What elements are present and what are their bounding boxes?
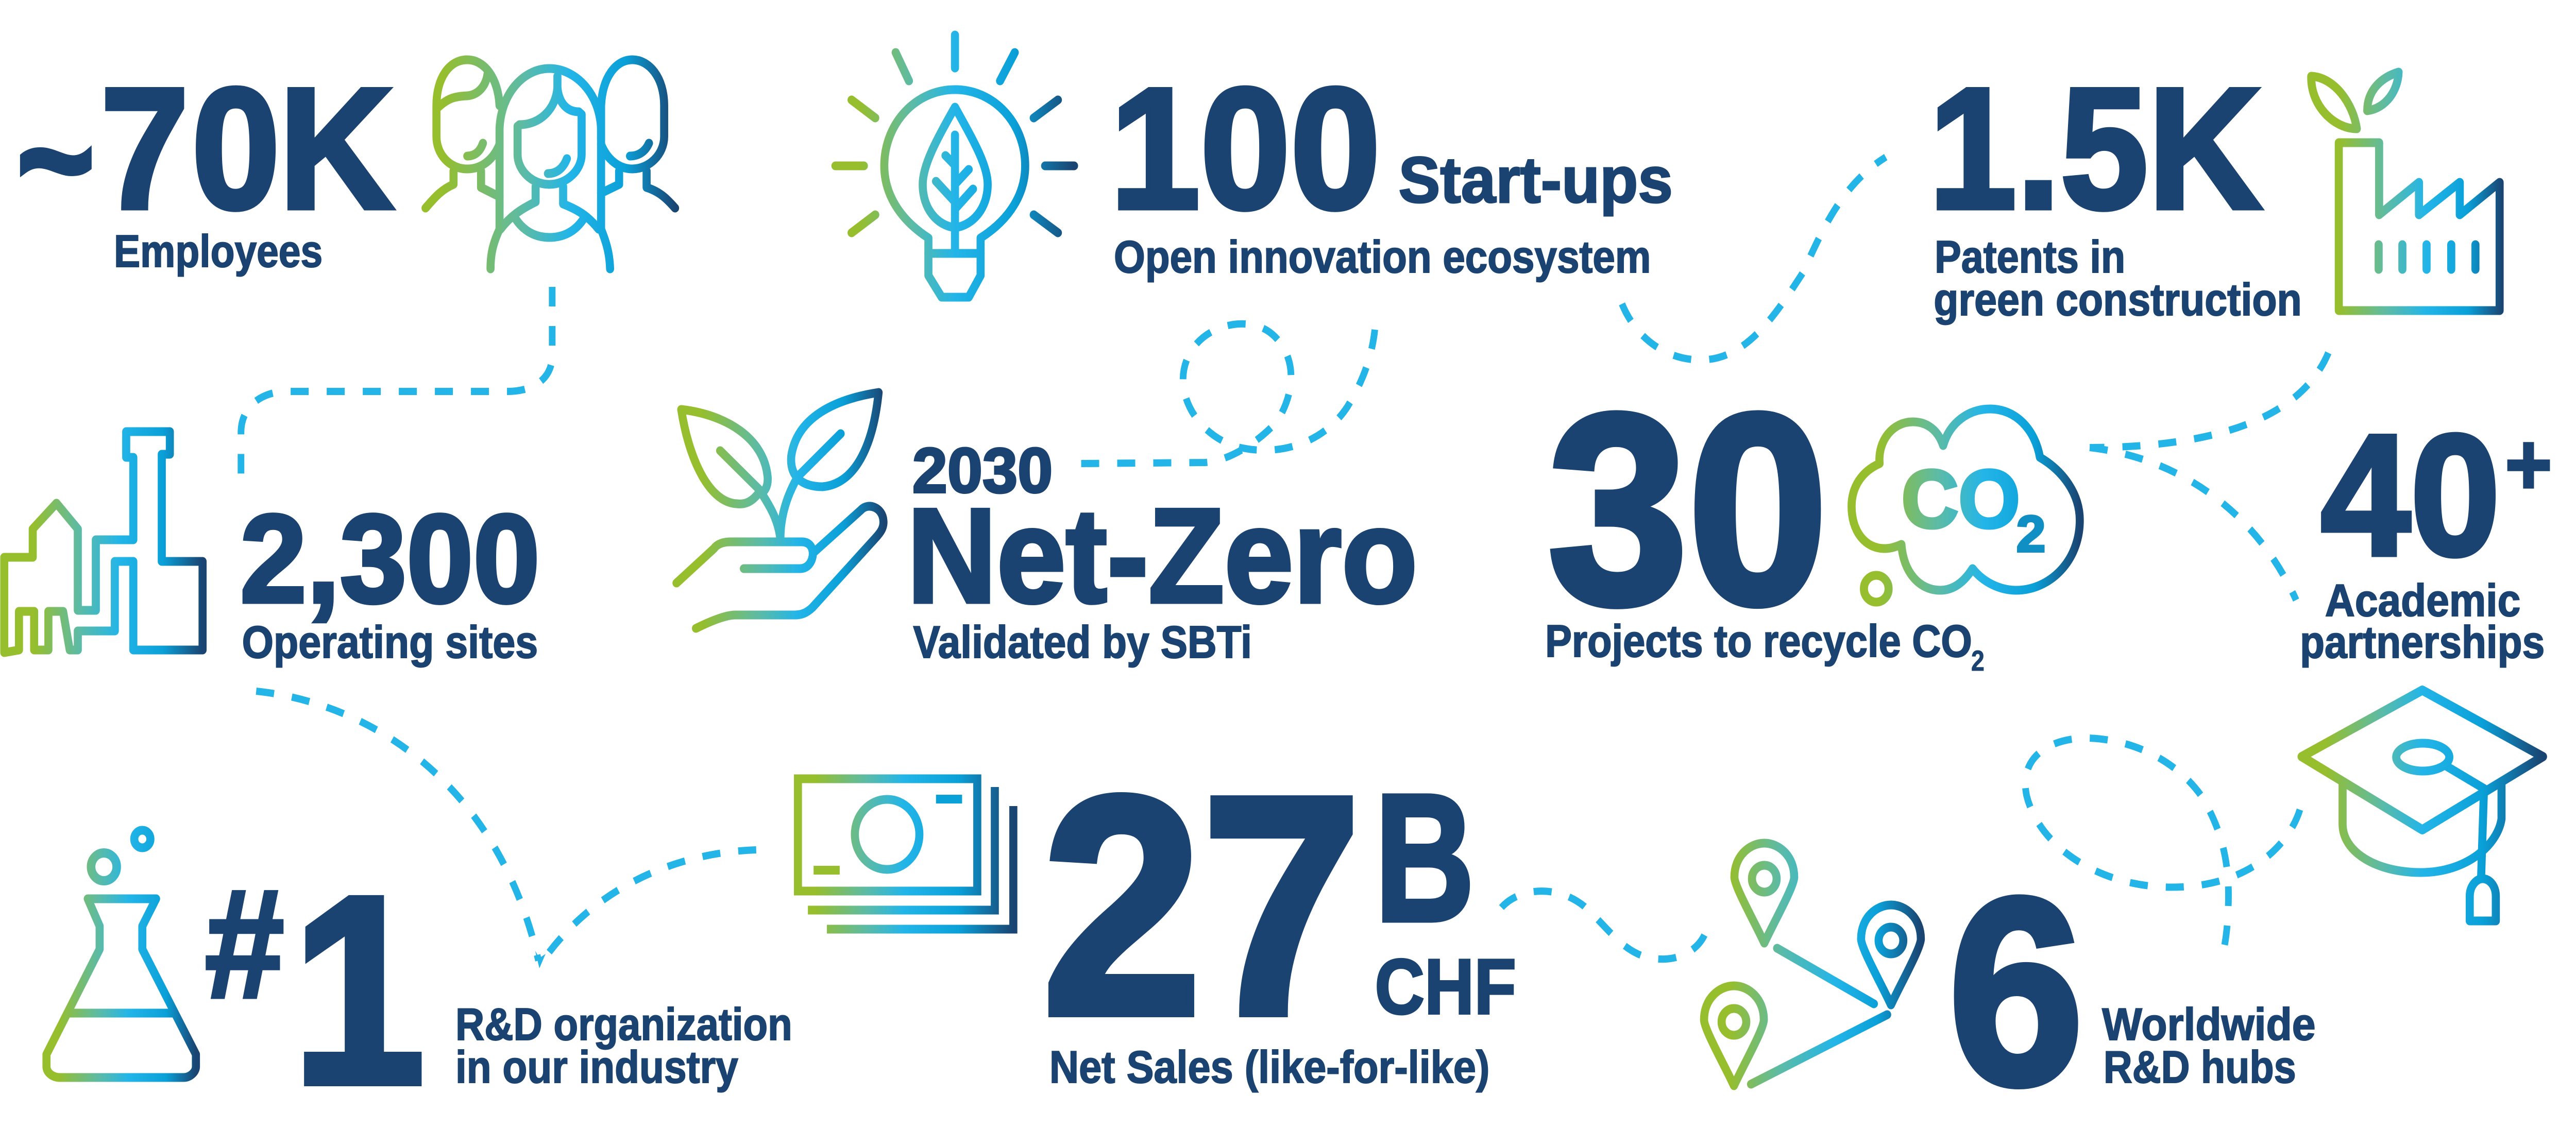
stat: 6: 6: [1948, 843, 2083, 1139]
arrow: ecosystem to patents: [1622, 157, 1886, 360]
cloud text CO: CO: [1902, 453, 2020, 545]
arrow: net-zero loop to start-ups: [1081, 312, 1376, 464]
label: Open innovation ecosystem: Open innovation ecosystem: [1114, 231, 1651, 282]
cloud text subscript 2: 2: [2016, 506, 2046, 563]
icon: graduation cap: [2302, 690, 2543, 921]
icon: industrial site: [4, 432, 202, 653]
stat: 27: 27: [1042, 732, 1362, 1079]
dashed connectors: [241, 157, 2328, 966]
label: R&D hubs: R&D hubs: [2104, 1041, 2296, 1092]
arrow: cloud to academic partnerships: [2090, 448, 2296, 600]
label: Employees: Employees: [114, 226, 323, 277]
icon: banknote mark right: [936, 795, 962, 803]
label: Validated by SBTi: Validated by SBTi: [913, 617, 1252, 668]
panel: net sales: [798, 732, 1516, 1092]
panel: net-zero: [676, 392, 1417, 668]
label: Academic: Academic: [2325, 575, 2520, 626]
panel: employees: [18, 53, 675, 277]
label: partnerships: partnerships: [2300, 617, 2545, 668]
arrow: graduation cap loop to hubs: [2025, 738, 2300, 963]
icon: banknote mark left: [814, 866, 840, 875]
icon: hand holding plant: [676, 392, 884, 628]
stat: plus sign: +: [2505, 415, 2552, 513]
stat: 40: 40: [2321, 399, 2500, 592]
arrow: net sales to hubs: [1501, 891, 1706, 959]
arrow: operating sites to #1: [256, 691, 538, 961]
icon: flask: [46, 830, 196, 1077]
icon: factory with leaves: [2311, 72, 2500, 311]
panel: CO2 projects: [1545, 358, 2080, 677]
arrowhead: [535, 951, 546, 968]
icon: banknotes: [798, 779, 1013, 929]
icon: CO2 cloud: [1852, 409, 2080, 602]
label: Net Sales (like-for-like): Net Sales (like-for-like): [1049, 1041, 1489, 1092]
stat: 30: 30: [1548, 358, 1828, 660]
panel: R&D organization: [46, 830, 792, 1139]
label: Projects to recycle CO2: Projects to recycle CO: [1545, 615, 1972, 666]
label: Start-ups: Start-ups: [1399, 144, 1673, 216]
label: R&D organization: R&D organization: [455, 999, 792, 1050]
stat: 100: 100: [1110, 53, 1381, 245]
cloud outline: [1852, 409, 2080, 602]
label: green construction: green construction: [1934, 274, 2302, 325]
label: Patents in: Patents in: [1935, 231, 2125, 282]
stat: 2,300: 2,300: [240, 488, 540, 629]
label: Worldwide: Worldwide: [2102, 999, 2315, 1050]
icon: light bulb with leaf: [836, 35, 1074, 297]
stat: 1: 1: [292, 841, 425, 1139]
stat: Net-Zero: Net-Zero: [907, 481, 1417, 631]
label: in our industry: in our industry: [455, 1041, 738, 1092]
panel: patents: [1929, 53, 2500, 325]
stat: ~70K: ~: [18, 81, 93, 238]
stat: CHF: CHF: [1375, 943, 1516, 1030]
arrow: factory to cloud: [2090, 353, 2328, 448]
label: Operating sites: Operating sites: [242, 617, 538, 668]
arrow: net sales to #1: [539, 850, 756, 966]
stat: 1.5K: 1.5K: [1929, 53, 2262, 245]
arrow: employees to operating sites: [241, 287, 552, 476]
stat: 2030: 2030: [912, 436, 1053, 506]
stat: B: B: [1375, 757, 1475, 959]
stat: #1: #: [205, 858, 284, 1031]
icon: three people: [426, 60, 675, 269]
stat: ~70K: 70K: [100, 53, 394, 245]
panel: R&D hubs: [1704, 843, 2315, 1139]
label: subscript 2: 2: [1971, 645, 1985, 677]
panel: academic partnerships: [2300, 399, 2552, 921]
icon: map pins: [1704, 843, 1921, 1086]
panel: operating sites: [4, 432, 540, 668]
panel: start-ups: [836, 35, 1673, 297]
